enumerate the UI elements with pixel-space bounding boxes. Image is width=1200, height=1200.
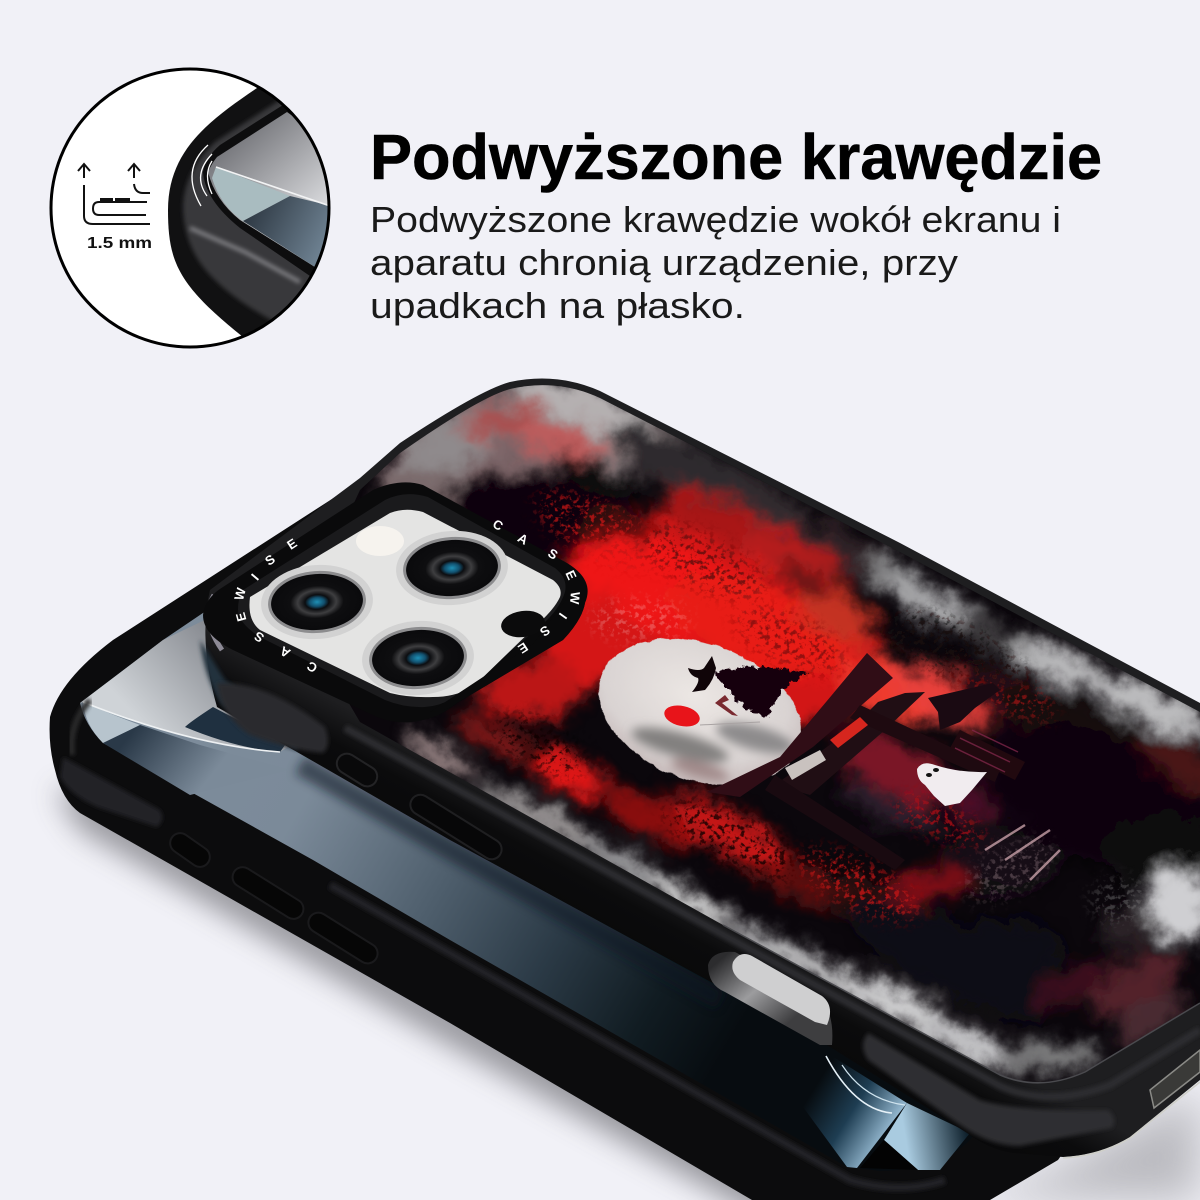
screen bottom blue glow — [770, 1053, 970, 1170]
side button small — [333, 750, 381, 790]
teal reflection — [212, 167, 290, 221]
shrine silhouette — [928, 683, 1025, 780]
case light edge — [1063, 1082, 1200, 1158]
case body — [205, 379, 1200, 1157]
CASEWISE ring text: S — [537, 622, 553, 640]
dark screen reflection — [243, 196, 328, 266]
drop shadow under phones — [55, 790, 1200, 1200]
witch on broom — [688, 656, 807, 717]
side blue tint near camera — [200, 640, 300, 750]
screen upper grey reflection — [80, 560, 330, 752]
lower phone frame — [50, 470, 1100, 1200]
lower phone frame highlight — [330, 885, 945, 1188]
ghost — [917, 763, 987, 806]
camera plate — [249, 510, 561, 697]
lower phone buttons — [166, 829, 381, 967]
CASEWISE ring text: I — [248, 571, 262, 583]
side button long — [407, 791, 505, 863]
body text: Podwyższone krawędzie wokół ekranu i — [370, 199, 1061, 240]
lens 1 — [259, 561, 375, 643]
CASEWISE ring text: S — [251, 628, 267, 646]
CASEWISE ring text: E — [233, 611, 249, 623]
right port — [1150, 1050, 1200, 1108]
bevel highlights — [190, 228, 300, 282]
lower phone screen — [80, 500, 1000, 1171]
side patch near corner — [863, 1033, 1114, 1146]
screen pale triangle — [83, 702, 140, 743]
CASEWISE ring text: C — [304, 658, 320, 676]
body text — [370, 199, 1061, 326]
tree silhouette by gate — [879, 601, 1035, 697]
CASEWISE ring text: I — [556, 610, 570, 622]
inset screen — [208, 112, 340, 267]
reflection line — [216, 167, 330, 206]
lower phone with screen — [50, 470, 1100, 1200]
inset background — [51, 69, 329, 347]
microphone hole — [499, 608, 547, 640]
body text: aparatu chronią urządzenie, przy — [370, 242, 958, 283]
lower phone corner band — [71, 700, 90, 755]
paint speckle texture — [485, 477, 1150, 934]
CASEWISE ring text: E — [284, 535, 300, 553]
body text: upadkach na płasko. — [370, 285, 745, 326]
CASEWISE ring text: S — [545, 545, 561, 563]
CASEWISE ring text — [231, 516, 583, 676]
CASEWISE ring text: W — [567, 591, 583, 605]
torii gate — [707, 653, 1000, 870]
art gloss edge — [723, 925, 1200, 1083]
raised edge icon — [78, 164, 150, 224]
icon caption: 1.5 mm — [87, 235, 152, 252]
screen dark shadow shape — [185, 707, 285, 752]
CASEWISE ring text: A — [277, 643, 293, 661]
side highlight band — [345, 728, 1200, 1097]
upper phone case — [200, 379, 1200, 1158]
title: Podwyższone krawędzie — [370, 121, 1102, 193]
CASEWISE ring text: W — [231, 585, 249, 602]
bump inner bevel — [238, 494, 566, 707]
bump outer ring — [203, 482, 588, 722]
red balloon — [664, 706, 760, 726]
CASEWISE ring text: A — [515, 530, 531, 548]
case bevel — [182, 101, 310, 320]
bump art rim — [209, 595, 222, 650]
water reflections — [985, 825, 1060, 880]
inset phone corner — [168, 88, 340, 340]
art base and painted clouds — [350, 385, 1200, 1082]
inset ring — [51, 69, 329, 347]
CASEWISE ring text: C — [490, 516, 506, 534]
moon — [598, 638, 802, 786]
side patch near camera — [217, 683, 328, 753]
camera bump — [203, 482, 588, 722]
bump ring over hole — [430, 600, 585, 712]
CASEWISE ring text: S — [262, 551, 278, 569]
CASEWISE ring text: E — [515, 639, 531, 657]
inset circle: raised edge detail — [51, 69, 340, 347]
signal arcs — [192, 145, 212, 206]
screen curved reflection line — [83, 702, 280, 752]
lens 3 — [360, 617, 476, 699]
case edge — [168, 88, 280, 336]
artwork on case back — [350, 385, 1200, 1084]
lower phone corner patch — [60, 757, 162, 827]
CASEWISE ring text: E — [562, 568, 580, 582]
screen dark wedge — [103, 725, 290, 795]
charging port opening — [708, 952, 832, 1045]
shadow cast by upper phone — [300, 765, 720, 1000]
flash — [356, 526, 404, 556]
lens 2 — [394, 527, 510, 609]
inner black rim — [203, 106, 314, 276]
